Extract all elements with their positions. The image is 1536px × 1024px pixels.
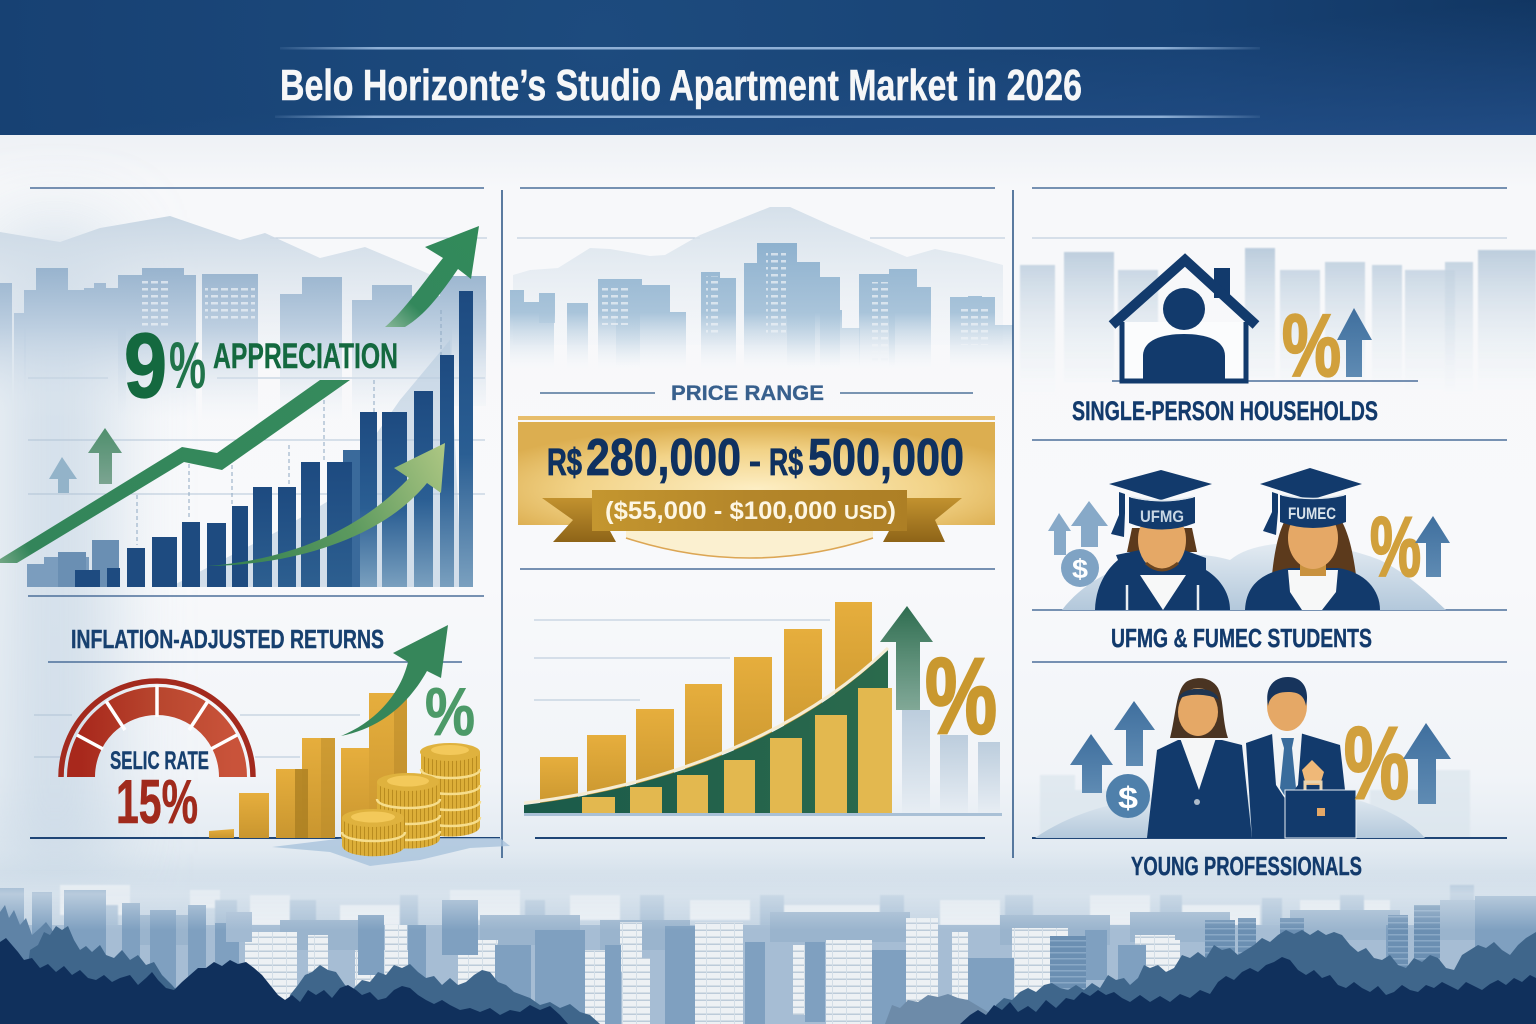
icon: percent and arrow: %	[1344, 706, 1409, 820]
percent sign: %	[425, 674, 475, 750]
stat: 9% appreciation: %	[169, 328, 206, 402]
gauge: selic rate: 15%	[116, 768, 198, 837]
icon: percent and arrow: %	[1370, 500, 1421, 594]
small house badge	[1302, 760, 1324, 785]
price values: R$	[769, 442, 803, 484]
green area	[524, 650, 888, 813]
bar chart: rising navy bars	[75, 291, 473, 587]
mid trees	[20, 926, 1536, 1024]
back bars	[540, 602, 872, 807]
front bars	[582, 688, 892, 813]
right panel backdrop: skyline	[1020, 248, 1536, 838]
person: woman	[1147, 678, 1252, 838]
white towers	[245, 918, 1180, 1024]
ribbon tails	[542, 498, 616, 542]
price values: R$	[547, 442, 582, 484]
arc under banner	[626, 525, 873, 558]
gauge: selic rate: SELIC RATE	[110, 747, 209, 775]
icons: arrows and dollar: $	[1072, 554, 1088, 584]
price values: -	[749, 443, 761, 481]
hill	[1062, 543, 1446, 610]
hill	[1035, 795, 1425, 838]
student: UFMG	[1095, 470, 1230, 610]
bar chart: gold bars	[209, 693, 407, 838]
dark trees	[0, 938, 1536, 1024]
header band	[0, 0, 1536, 135]
panel: price range	[518, 382, 1002, 816]
usd range: ($55,000 - $100,000 USD)	[605, 497, 896, 525]
student: FUMEC: FUMEC	[1288, 504, 1336, 523]
percent sign: %	[925, 635, 997, 756]
panel: young professionals	[1035, 677, 1451, 881]
chart: gold bars with green curve	[524, 602, 1002, 816]
panel: students	[1048, 468, 1450, 653]
price values: 280,000	[586, 429, 741, 487]
icons: arrows and dollar	[1070, 701, 1155, 818]
left panel backdrop: mountains and skyline	[0, 216, 487, 587]
bottom cityscape	[0, 850, 1536, 1024]
secondary green arrow	[207, 443, 445, 566]
main green growth arrow	[0, 226, 479, 563]
heading: INFLATION-ADJUSTED RETURNS	[71, 624, 384, 654]
panel: single-person households	[1072, 260, 1378, 426]
coin stacks	[342, 743, 480, 856]
label: YOUNG PROFESSIONALS	[1131, 851, 1362, 881]
center panel backdrop: mountains and skyline	[510, 207, 1013, 375]
pale fading bars	[902, 710, 1000, 815]
far trees	[0, 905, 998, 1024]
rules and dividers	[28, 188, 1507, 858]
price values: 500,000	[808, 429, 964, 487]
icons: arrows and dollar: $	[1118, 780, 1138, 815]
person: man	[1246, 677, 1356, 838]
ribbon	[592, 490, 907, 531]
icons: arrows and dollar	[1048, 501, 1108, 587]
stat: 9% appreciation: 9	[124, 315, 167, 417]
panel: appreciation	[0, 226, 479, 587]
green arrow	[341, 625, 448, 736]
title: Belo Horizonte’s Studio Apartment Market in 2026	[280, 61, 1082, 110]
student: FUMEC	[1245, 468, 1380, 610]
small arrows	[49, 428, 122, 493]
coin shadow	[272, 838, 510, 866]
distant haze skyline	[0, 850, 1536, 940]
stat: 9% appreciation	[124, 315, 398, 417]
faint grid rules	[28, 238, 1507, 757]
gold banner	[518, 416, 995, 558]
blue towers	[0, 888, 1536, 1024]
icon: briefcase	[1285, 782, 1356, 838]
heading: PRICE RANGE	[671, 382, 824, 405]
student: UFMG: UFMG	[1140, 507, 1184, 526]
label: UFMG & FUMEC STUDENTS	[1111, 623, 1372, 653]
label: SINGLE-PERSON HOUSEHOLDS	[1072, 396, 1378, 426]
icon: house with person	[1112, 260, 1256, 381]
icon: percent and arrow: %	[1282, 296, 1341, 395]
gauge: selic rate	[61, 681, 253, 837]
panel: inflation-adjusted returns	[61, 624, 510, 866]
stat: 9% appreciation: APPRECIATION	[213, 337, 398, 376]
up arrow	[880, 606, 933, 710]
price values	[547, 429, 964, 487]
